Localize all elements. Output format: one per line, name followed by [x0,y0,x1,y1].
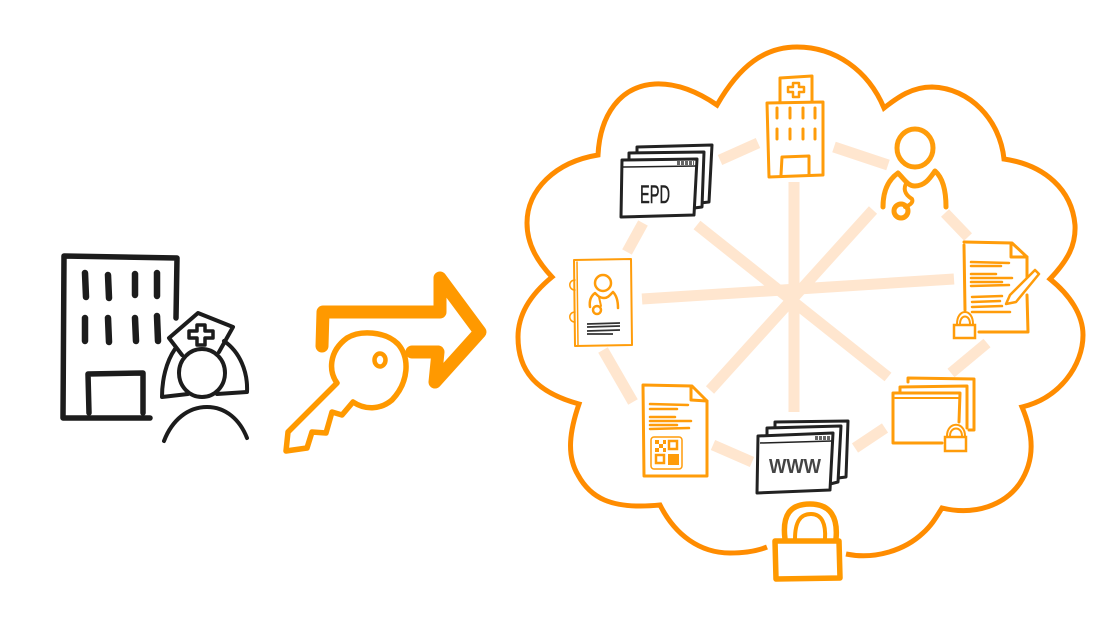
QR code [651,437,682,469]
icon: signed document with pen and lock [954,242,1039,338]
icon: patient record booklet [570,259,632,346]
icon: WWW browser windows [757,421,848,493]
icon: large padlock [775,504,840,579]
icon: EPD browser windows [621,145,712,217]
icon: document with QR code [643,385,707,476]
small lock on document [954,312,975,338]
icon: locked folder stack [893,378,974,451]
label: EPD: EPD [640,181,670,209]
network spokes connecting the cloud items [603,143,987,462]
icon: orange arrow [322,278,480,382]
small lock on folder [945,425,966,451]
icon: doctor with stethoscope [883,129,946,218]
cloud outline [518,47,1083,556]
icon: orange key [286,333,406,451]
icon: orange hospital [767,76,823,177]
label: WWW: WWW [769,456,821,478]
icon: black hospital building [63,256,177,418]
icon: nurse [162,313,247,441]
